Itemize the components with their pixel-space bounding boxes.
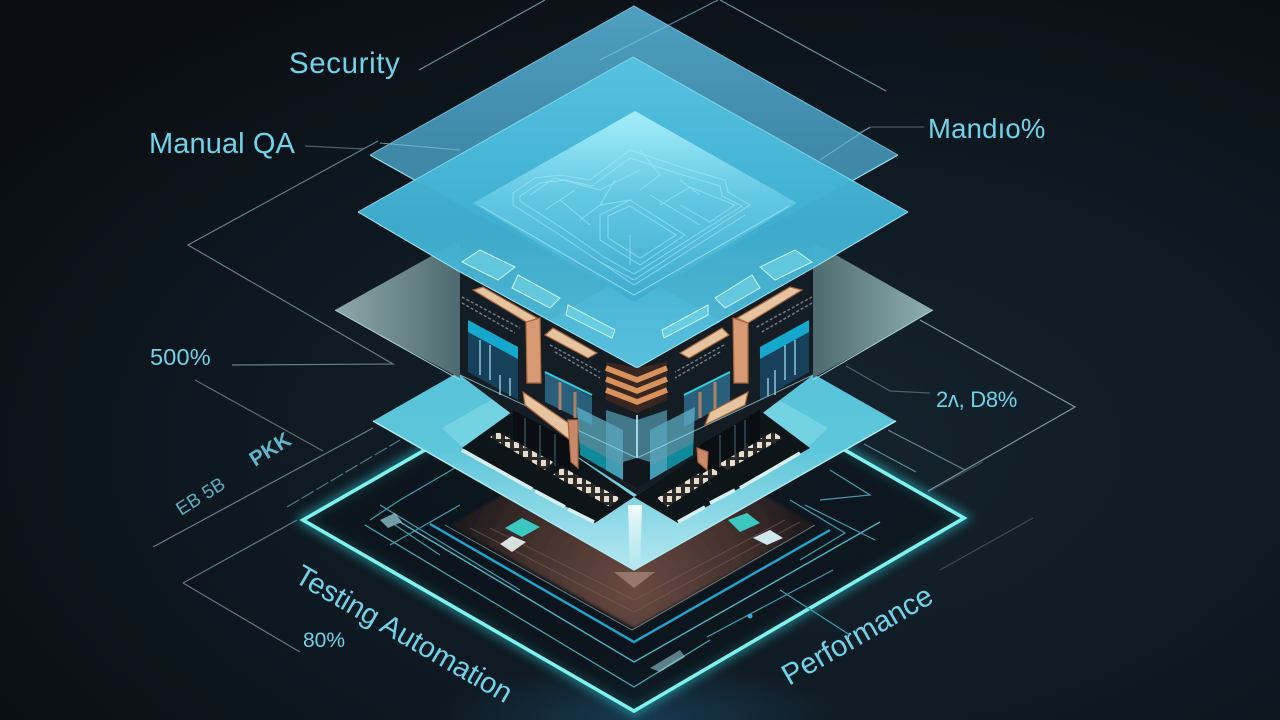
chip micro text: [462, 297, 812, 378]
leader lines: [153, 0, 1075, 652]
icon: board chips: [380, 513, 783, 672]
label: Manual QA: Manual QA: [149, 128, 296, 160]
label: 2/L D8%: 2ʌ, D8%: [936, 387, 1017, 412]
label: 80%: 80%: [303, 629, 345, 652]
orange beams: [473, 287, 802, 470]
chip vents: [513, 410, 760, 475]
glass cube edge: [460, 375, 813, 458]
orange chevron: [606, 362, 667, 413]
label: small rotated value: PKK: [245, 428, 295, 471]
light beam: [628, 505, 642, 570]
label: small rotated caption: EB 5B: [173, 474, 229, 520]
panel: circuit board: [365, 420, 880, 687]
panel: glowing base frame: [303, 330, 964, 711]
glass lower panels: [577, 407, 695, 488]
panel: inner circuit plate: [473, 111, 797, 302]
label: Performance: Performance: [776, 579, 939, 692]
panel: lower glass plate: [373, 272, 896, 570]
label: 500%: 500%: [150, 344, 211, 370]
panel: second glass plate: [358, 57, 908, 368]
label: Security: Security: [289, 47, 400, 80]
circuit traces: [513, 150, 750, 285]
panel: top glass plate: [370, 0, 898, 300]
tile: lower plate corners: [442, 392, 828, 447]
panel: central chip cube: [460, 270, 813, 495]
panel: gray glass plate: [335, 240, 933, 380]
dark chip base, left: [462, 412, 634, 523]
label: Testing Automation: Testing Automation: [290, 559, 518, 710]
dark chip base, right: [634, 412, 810, 523]
label: Mandio%: Mandıo%: [928, 113, 1046, 144]
upper layer tiles: [462, 250, 812, 338]
blue screens: [468, 320, 809, 427]
connector strips: [462, 432, 800, 522]
